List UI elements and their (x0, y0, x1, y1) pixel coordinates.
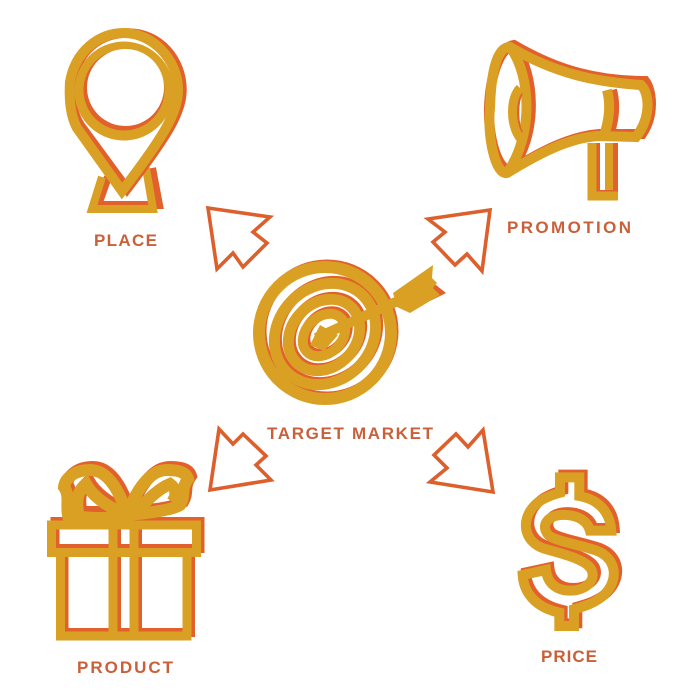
arrow: to promotion (428, 210, 490, 271)
label: place: PLACE (94, 231, 157, 250)
label: product: PRODUCT (77, 658, 174, 677)
arrow: to product (210, 429, 271, 490)
icon: price dollar sign (523, 475, 617, 626)
label: promotion: PROMOTION (507, 218, 631, 237)
icon: target with arrow (254, 261, 446, 405)
label: price: PRICE (541, 647, 597, 666)
icon: promotion megaphone (489, 45, 651, 196)
icon: product gift box (52, 467, 200, 636)
arrow: to price (430, 430, 493, 492)
label: target market: TARGET MARKET (267, 424, 434, 443)
arrow: to place (208, 208, 270, 269)
icon: place map pin (70, 33, 182, 209)
